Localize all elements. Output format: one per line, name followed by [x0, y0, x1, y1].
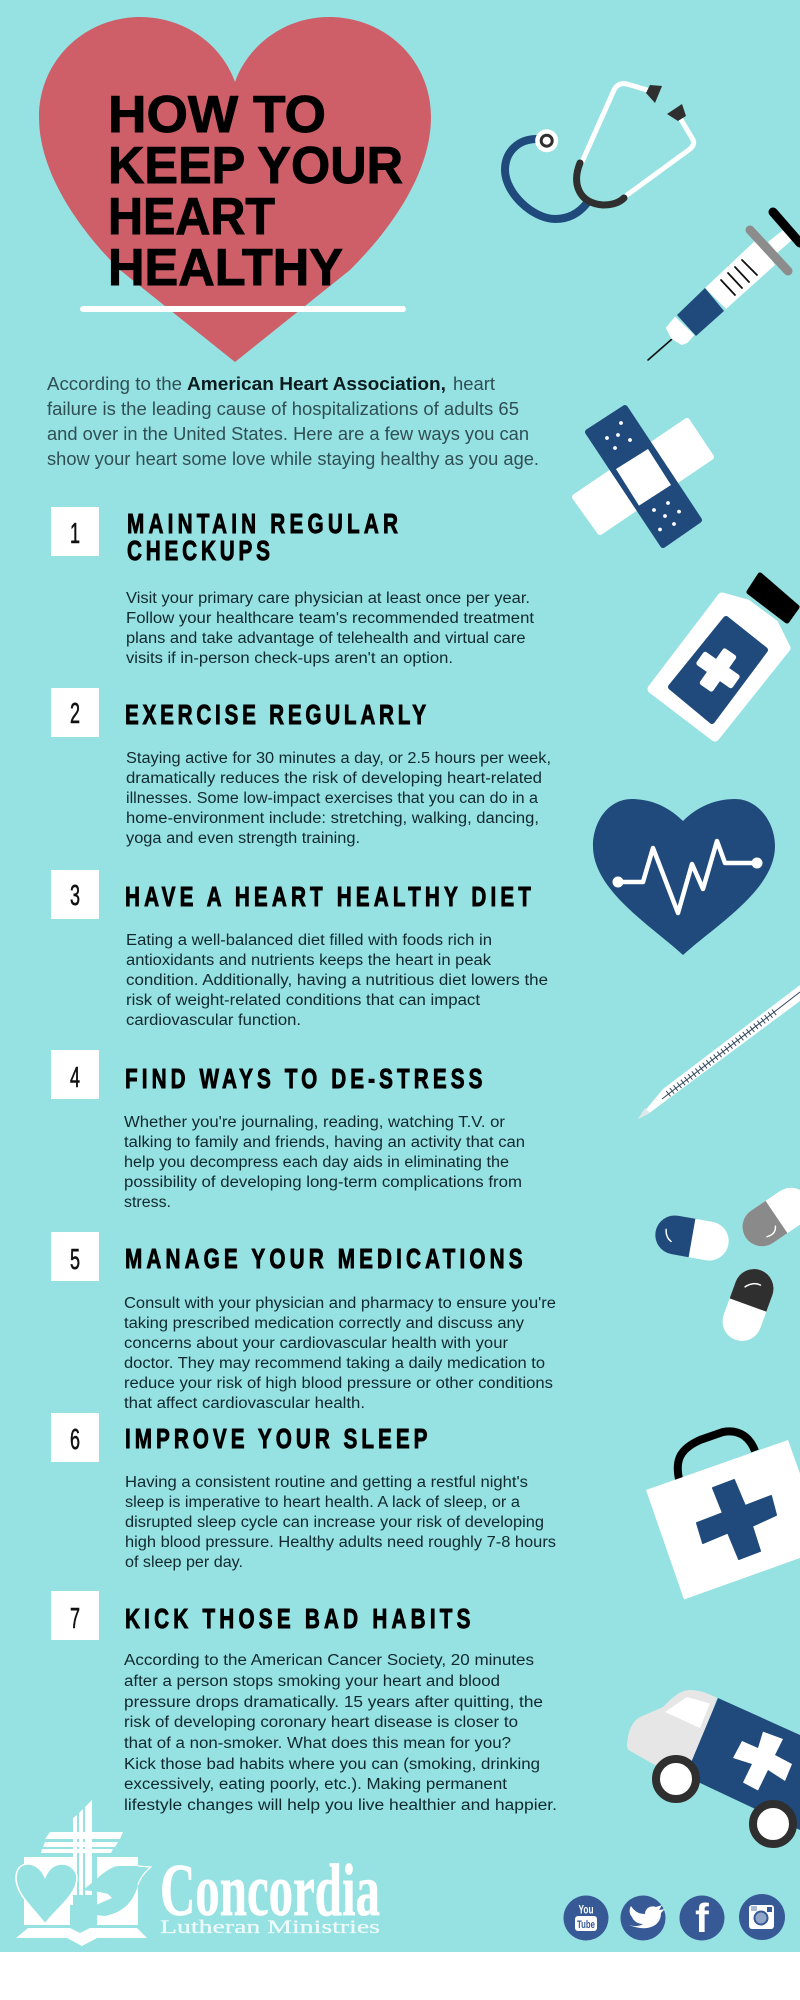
intro paragraph: [47, 373, 539, 469]
body text 1: Visit your primary care physician at least once per year.: [126, 590, 530, 607]
body text 4: [124, 1114, 525, 1211]
body text 2: dramatically reduces the risk of developing heart-related: [126, 770, 542, 787]
step 2: [51, 688, 551, 847]
body text 6: Having a consistent routine and getting a restful night's: [125, 1474, 528, 1491]
icon: heart with heartbeat: [593, 799, 775, 955]
step 6: [51, 1413, 556, 1571]
icon: syringe: [648, 212, 800, 360]
body text 2: yoga and even strength training.: [126, 830, 360, 847]
heading 3: HAVE A HEART HEALTHY DIET: [125, 882, 531, 913]
body text 6: of sleep per day.: [125, 1554, 243, 1571]
number badge 2: [51, 688, 99, 737]
title: HEART: [108, 188, 275, 246]
icon: grey capsule: [735, 1180, 800, 1254]
step 5: [51, 1232, 556, 1412]
body text 3: [126, 932, 548, 1029]
step 3: [51, 870, 548, 1029]
body text 7: after a person stops smoking your heart and blood: [124, 1673, 500, 1690]
icon: stethoscope: [505, 84, 694, 219]
heart shape: [39, 17, 431, 362]
icon: medicine bottle: [652, 575, 797, 737]
step 1: [51, 507, 535, 667]
body text 1: Follow your healthcare team's recommended treatment: [126, 610, 535, 627]
body text 3: Eating a well-balanced diet filled with foods rich in: [126, 932, 492, 949]
number badge 6: [51, 1413, 99, 1462]
heading 1: [127, 509, 398, 567]
number badge 7: [51, 1591, 99, 1640]
body text 4: help you decompress each day aids in eliminating the: [124, 1154, 509, 1171]
title: HOW TO: [108, 86, 326, 144]
number badge 5: 5: [70, 1244, 80, 1276]
body text 7: pressure drops dramatically. 15 years after quitting, the: [124, 1694, 543, 1711]
intro paragraph: heart: [453, 373, 495, 394]
heart title panel: [39, 17, 431, 362]
body text 5: [124, 1295, 556, 1412]
body text 5: Consult with your physician and pharmacy to ensure you're: [124, 1295, 556, 1312]
body text 7: lifestyle changes will help you live healthier and happier.: [124, 1797, 557, 1814]
intro paragraph: show your heart some love while staying healthy as you age.: [47, 448, 539, 469]
body text 7: that of a non-smoker. What does this mean for you?: [124, 1735, 511, 1752]
heading 6: IMPROVE YOUR SLEEP: [125, 1424, 428, 1455]
body text 5: reduce your risk of high blood pressure or other conditions: [124, 1375, 553, 1392]
number badge 4: [51, 1050, 99, 1099]
body text 6: sleep is imperative to heart health. A lack of sleep, or a: [125, 1494, 520, 1511]
body text 3: condition. Additionally, having a nutritious diet lowers the: [126, 972, 548, 989]
body text 3: cardiovascular function.: [126, 1012, 301, 1029]
title underline: [80, 306, 406, 312]
body text 7: Kick those bad habits where you can (smoking, drinking: [124, 1756, 540, 1773]
intro paragraph: According to the: [47, 373, 182, 394]
number badge 2: 2: [70, 698, 80, 730]
logo wordmark: Concordia: [160, 1850, 380, 1932]
body text 2: Staying active for 30 minutes a day, or 2.5 hours per week,: [126, 750, 551, 767]
icon: black capsule: [717, 1264, 779, 1346]
intro paragraph: American Heart Association,: [187, 373, 446, 394]
body text 6: high blood pressure. Healthy adults need roughly 7-8 hours: [125, 1534, 556, 1551]
logo: Concordia Lutheran Ministries: [16, 1800, 380, 1946]
title: HEALTHY: [108, 239, 343, 297]
heading 1: MAINTAIN REGULAR: [127, 509, 398, 540]
icon: Facebook: [680, 1895, 724, 1941]
icon: ambulance: [627, 1690, 800, 1844]
body text 7: [124, 1652, 557, 1814]
heading 7: KICK THOSE BAD HABITS: [125, 1604, 471, 1635]
body text 1: visits if in-person check-ups aren't an option.: [126, 650, 453, 667]
body text 2: [126, 750, 551, 847]
logo tagline: Lutheran Ministries: [160, 1917, 380, 1938]
icon: first aid kit: [646, 1431, 800, 1600]
number badge 7: 7: [70, 1603, 80, 1635]
heading 4: FIND WAYS TO DE-STRESS: [125, 1064, 482, 1095]
number badge 1: [51, 507, 99, 556]
body text 5: doctor. They may recommend taking a daily medication to: [124, 1355, 545, 1372]
step 7: [51, 1591, 557, 1814]
intro paragraph: failure is the leading cause of hospitalizations of adults 65: [47, 398, 519, 419]
icon: navy capsule: [652, 1212, 732, 1264]
heading 5: MANAGE YOUR MEDICATIONS: [125, 1244, 523, 1275]
body text 4: possibility of developing long-term complications from: [124, 1174, 522, 1191]
body text 4: Whether you're journaling, reading, watching T.V. or: [124, 1114, 505, 1131]
body text 3: risk of weight-related conditions that can impact: [126, 992, 481, 1009]
icon: Facebook: f: [695, 1895, 709, 1941]
icon: thermometer: [638, 985, 800, 1119]
icon: YouTube: You: [578, 1902, 594, 1916]
body text 6: [125, 1474, 556, 1571]
icon: bandage: [575, 408, 711, 545]
step 4: [51, 1050, 525, 1211]
body text 7: excessively, eating poorly, etc.). Making permanent: [124, 1776, 508, 1793]
body text 4: stress.: [124, 1194, 171, 1211]
title: [108, 86, 403, 297]
body text 1: plans and take advantage of telehealth and virtual care: [126, 630, 526, 647]
body text 2: home-environment include: stretching, walking, dancing,: [126, 810, 539, 827]
body text 7: risk of developing coronary heart disease is closer to: [124, 1714, 518, 1731]
number badge 3: [51, 870, 99, 919]
number badge 3: 3: [70, 880, 80, 912]
title: KEEP YOUR: [108, 137, 403, 195]
icon: YouTube: Tube: [577, 1919, 595, 1931]
body text 1: [126, 590, 535, 667]
body text 5: concerns about your cardiovascular health with your: [124, 1335, 508, 1352]
icon: YouTube: [564, 1896, 608, 1940]
icon: Instagram: [739, 1894, 785, 1940]
number badge 5: [51, 1232, 99, 1281]
number badge 4: 4: [70, 1062, 80, 1094]
intro paragraph: and over in the United States. Here are a few ways you can: [47, 423, 529, 444]
body text 7: According to the American Cancer Society, 20 minutes: [124, 1652, 534, 1669]
heading 1: CHECKUPS: [127, 536, 270, 567]
body text 5: that affect cardiovascular health.: [124, 1395, 365, 1412]
body text 5: taking prescribed medication correctly and discuss any: [124, 1315, 524, 1332]
social icons: [564, 1894, 785, 1941]
body text 3: antioxidants and nutrients keeps the heart in peak: [126, 952, 491, 969]
body text 2: illnesses. Some low-impact exercises that you can do in a: [126, 790, 538, 807]
body text 6: disrupted sleep cycle can increase your risk of developing: [125, 1514, 544, 1531]
number badge 6: 6: [70, 1424, 80, 1456]
icon: Twitter: [620, 1896, 666, 1940]
number badge 1: 1: [70, 518, 80, 550]
body text 4: talking to family and friends, having an activity that can: [124, 1134, 525, 1151]
heading 2: EXERCISE REGULARLY: [125, 700, 427, 731]
logo emblem: [16, 1800, 151, 1946]
